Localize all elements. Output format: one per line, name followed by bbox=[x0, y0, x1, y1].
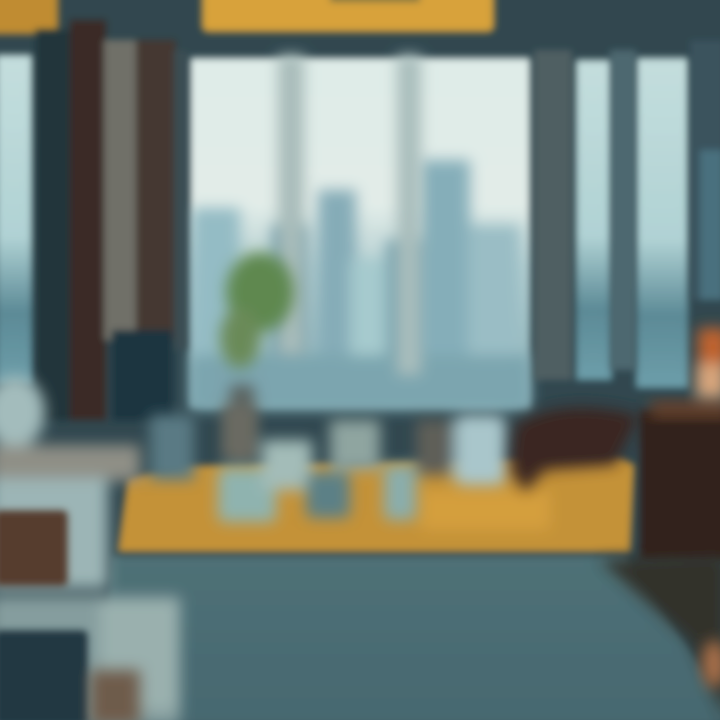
sofa body bbox=[0, 376, 180, 720]
brown throw bbox=[90, 670, 140, 720]
brown cushion bbox=[0, 510, 68, 586]
window sky bbox=[190, 58, 530, 408]
skyline buildings bbox=[190, 160, 530, 410]
navy cushion bbox=[0, 630, 88, 720]
potted plant bbox=[220, 252, 294, 460]
left sofa bbox=[0, 376, 180, 720]
right dark floor bbox=[600, 555, 720, 720]
right dark wooden table bbox=[640, 400, 720, 560]
window mullions bbox=[278, 55, 421, 375]
right windows bbox=[576, 58, 688, 388]
left dark curtains bbox=[36, 20, 188, 420]
right pillars bbox=[534, 40, 720, 380]
ceiling lights bbox=[0, 0, 494, 34]
left window bbox=[0, 55, 32, 385]
brown armchair bbox=[510, 407, 640, 492]
vases and tabletop objects bbox=[150, 405, 506, 522]
carpet bbox=[100, 556, 720, 720]
gold floor strip bbox=[118, 458, 634, 552]
central window with skyline bbox=[190, 55, 530, 410]
orange lamp bbox=[696, 328, 720, 398]
